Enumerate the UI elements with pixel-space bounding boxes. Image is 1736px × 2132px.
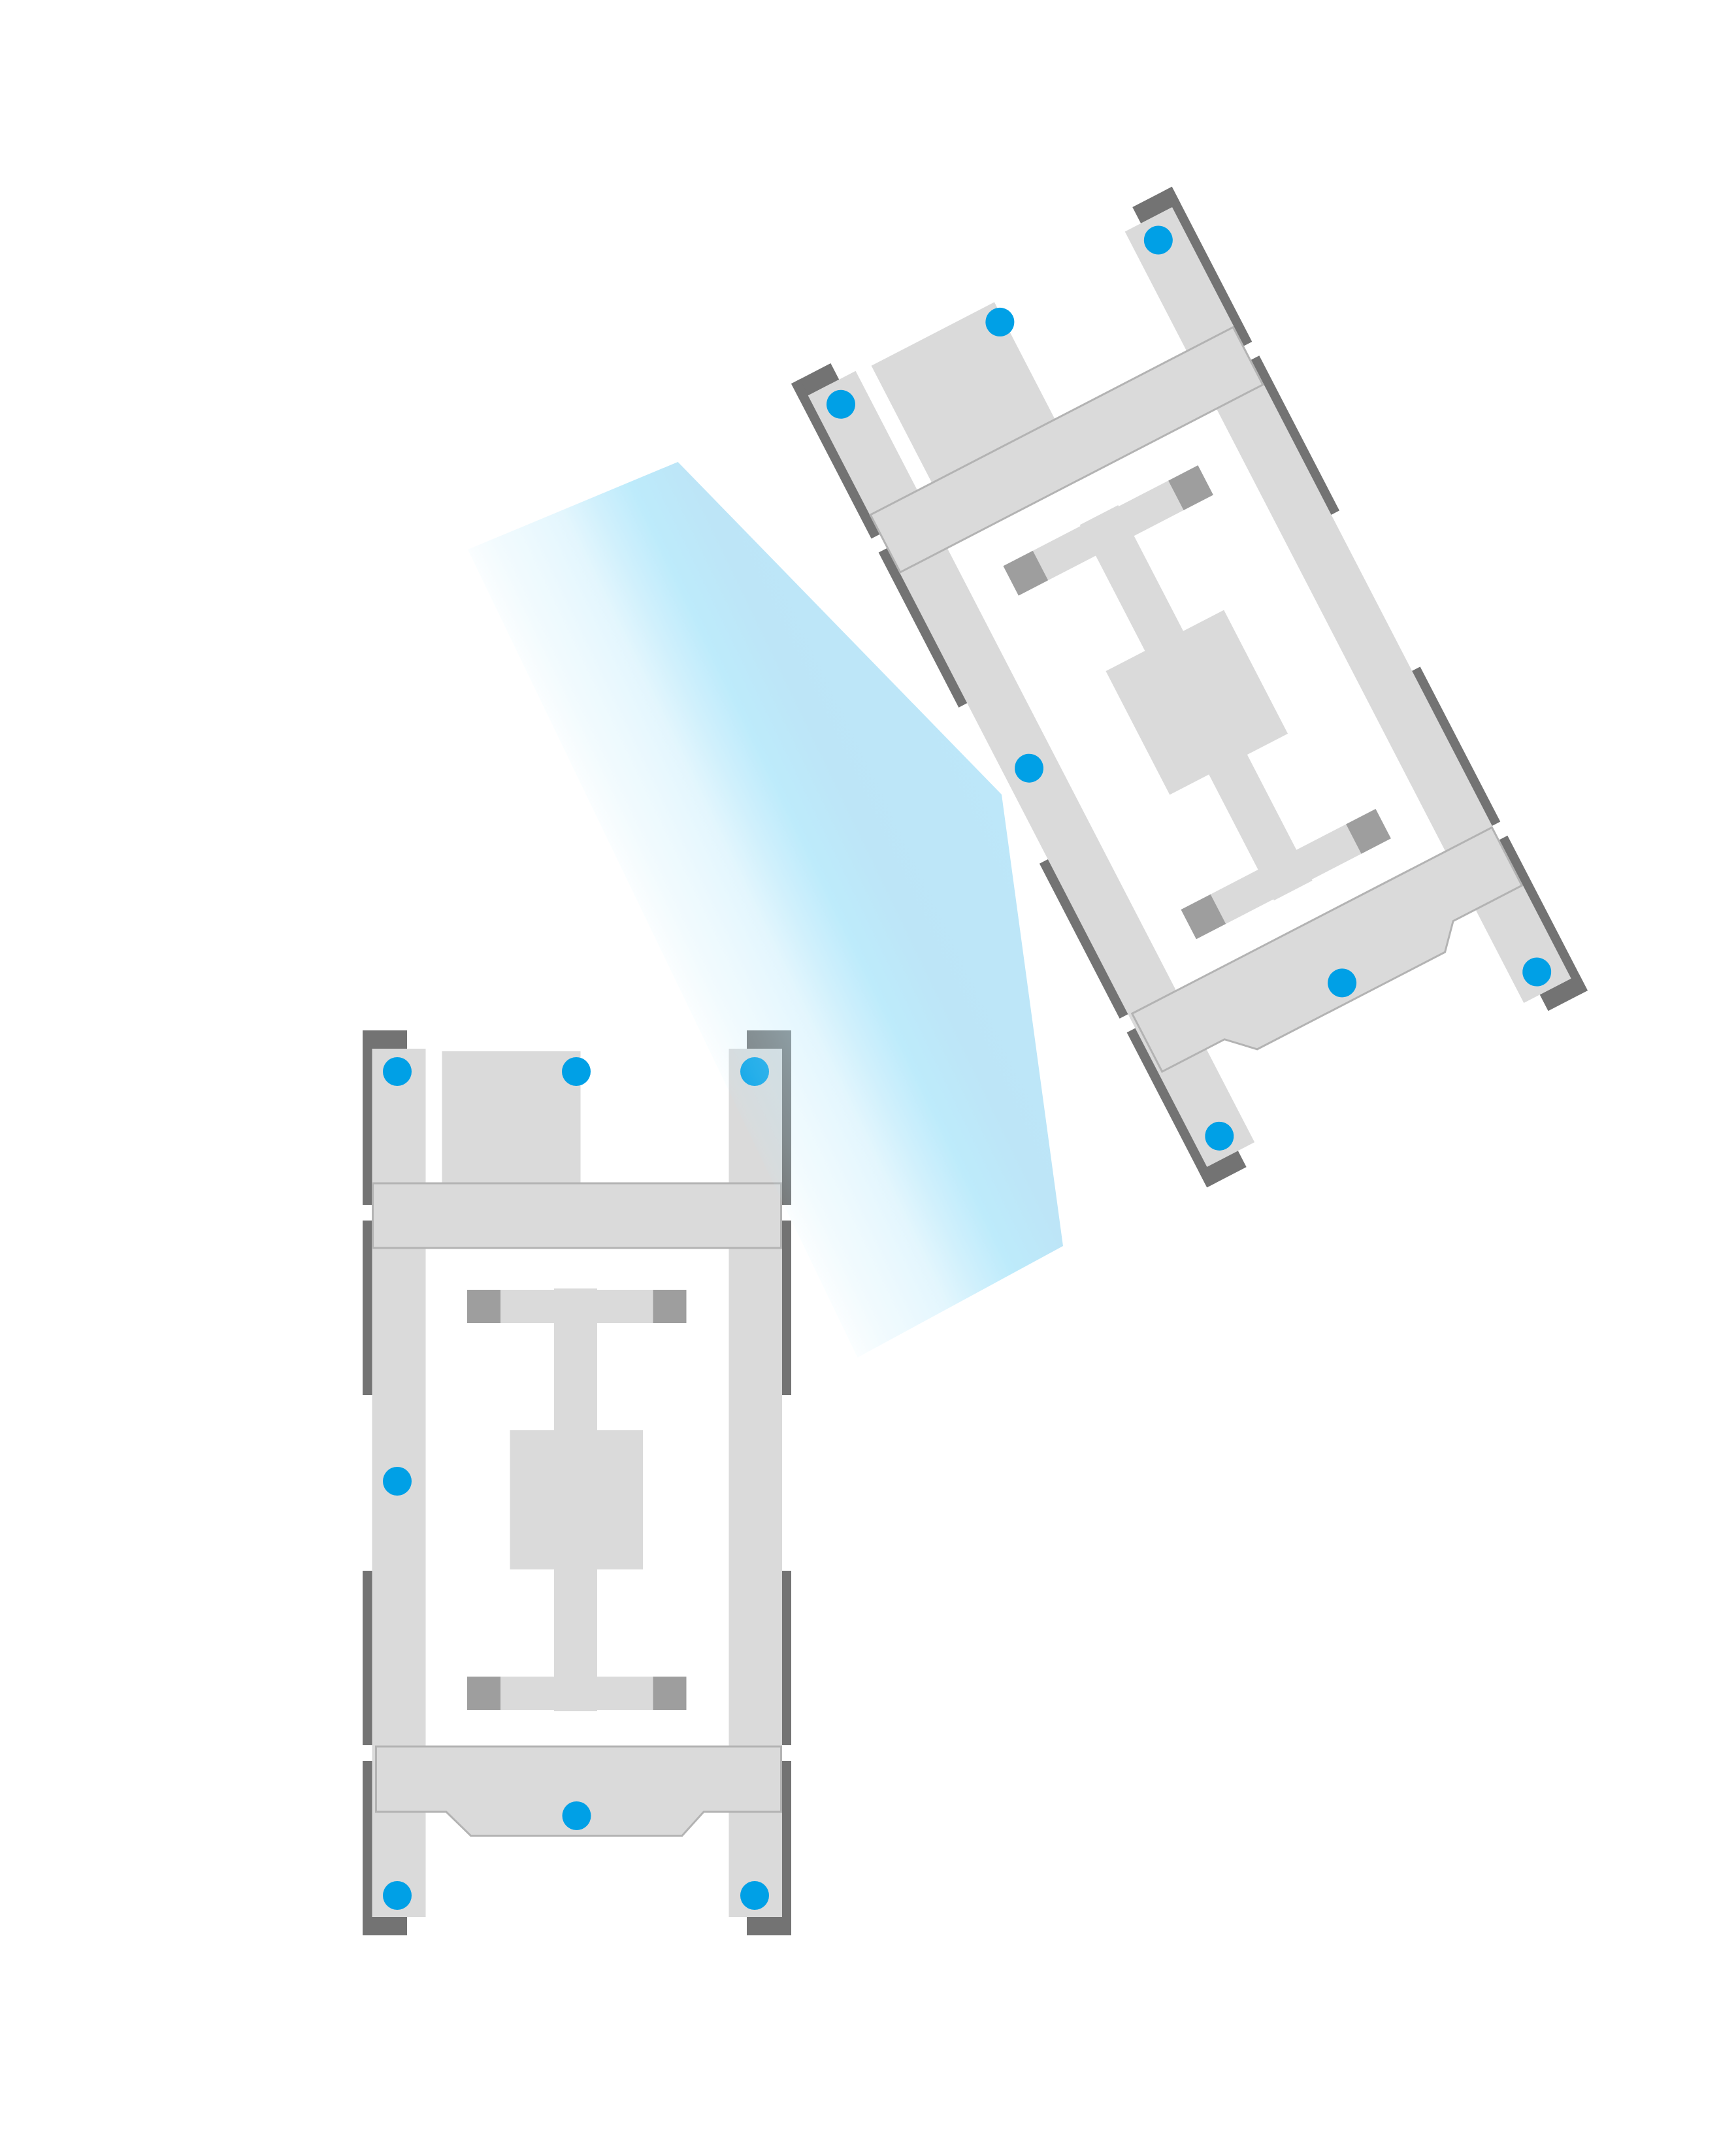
swept area gradient xyxy=(468,462,1063,1358)
upright rear bumper xyxy=(376,1747,781,1836)
upright tracks xyxy=(363,1030,791,1935)
rotated drivetrain xyxy=(1032,480,1362,925)
vehicle: upright chassis xyxy=(363,1030,791,1935)
upright sensor dots xyxy=(383,1057,769,1910)
upright front box xyxy=(442,1051,580,1183)
rotated tracks xyxy=(791,187,1588,1187)
upright front crossbar xyxy=(372,1183,781,1248)
rotated front box xyxy=(872,302,1055,483)
rotated rear bumper xyxy=(1132,827,1533,1093)
upright drivetrain xyxy=(500,1288,653,1711)
rotated wheels xyxy=(1003,465,1391,939)
rotated side rails xyxy=(808,207,1571,1167)
vehicle: rotated chassis xyxy=(791,187,1588,1187)
rotated sensor dots xyxy=(821,221,1556,1155)
upright wheels xyxy=(467,1290,686,1710)
rotated front crossbar xyxy=(870,327,1263,572)
upright side rails xyxy=(372,1049,782,1917)
